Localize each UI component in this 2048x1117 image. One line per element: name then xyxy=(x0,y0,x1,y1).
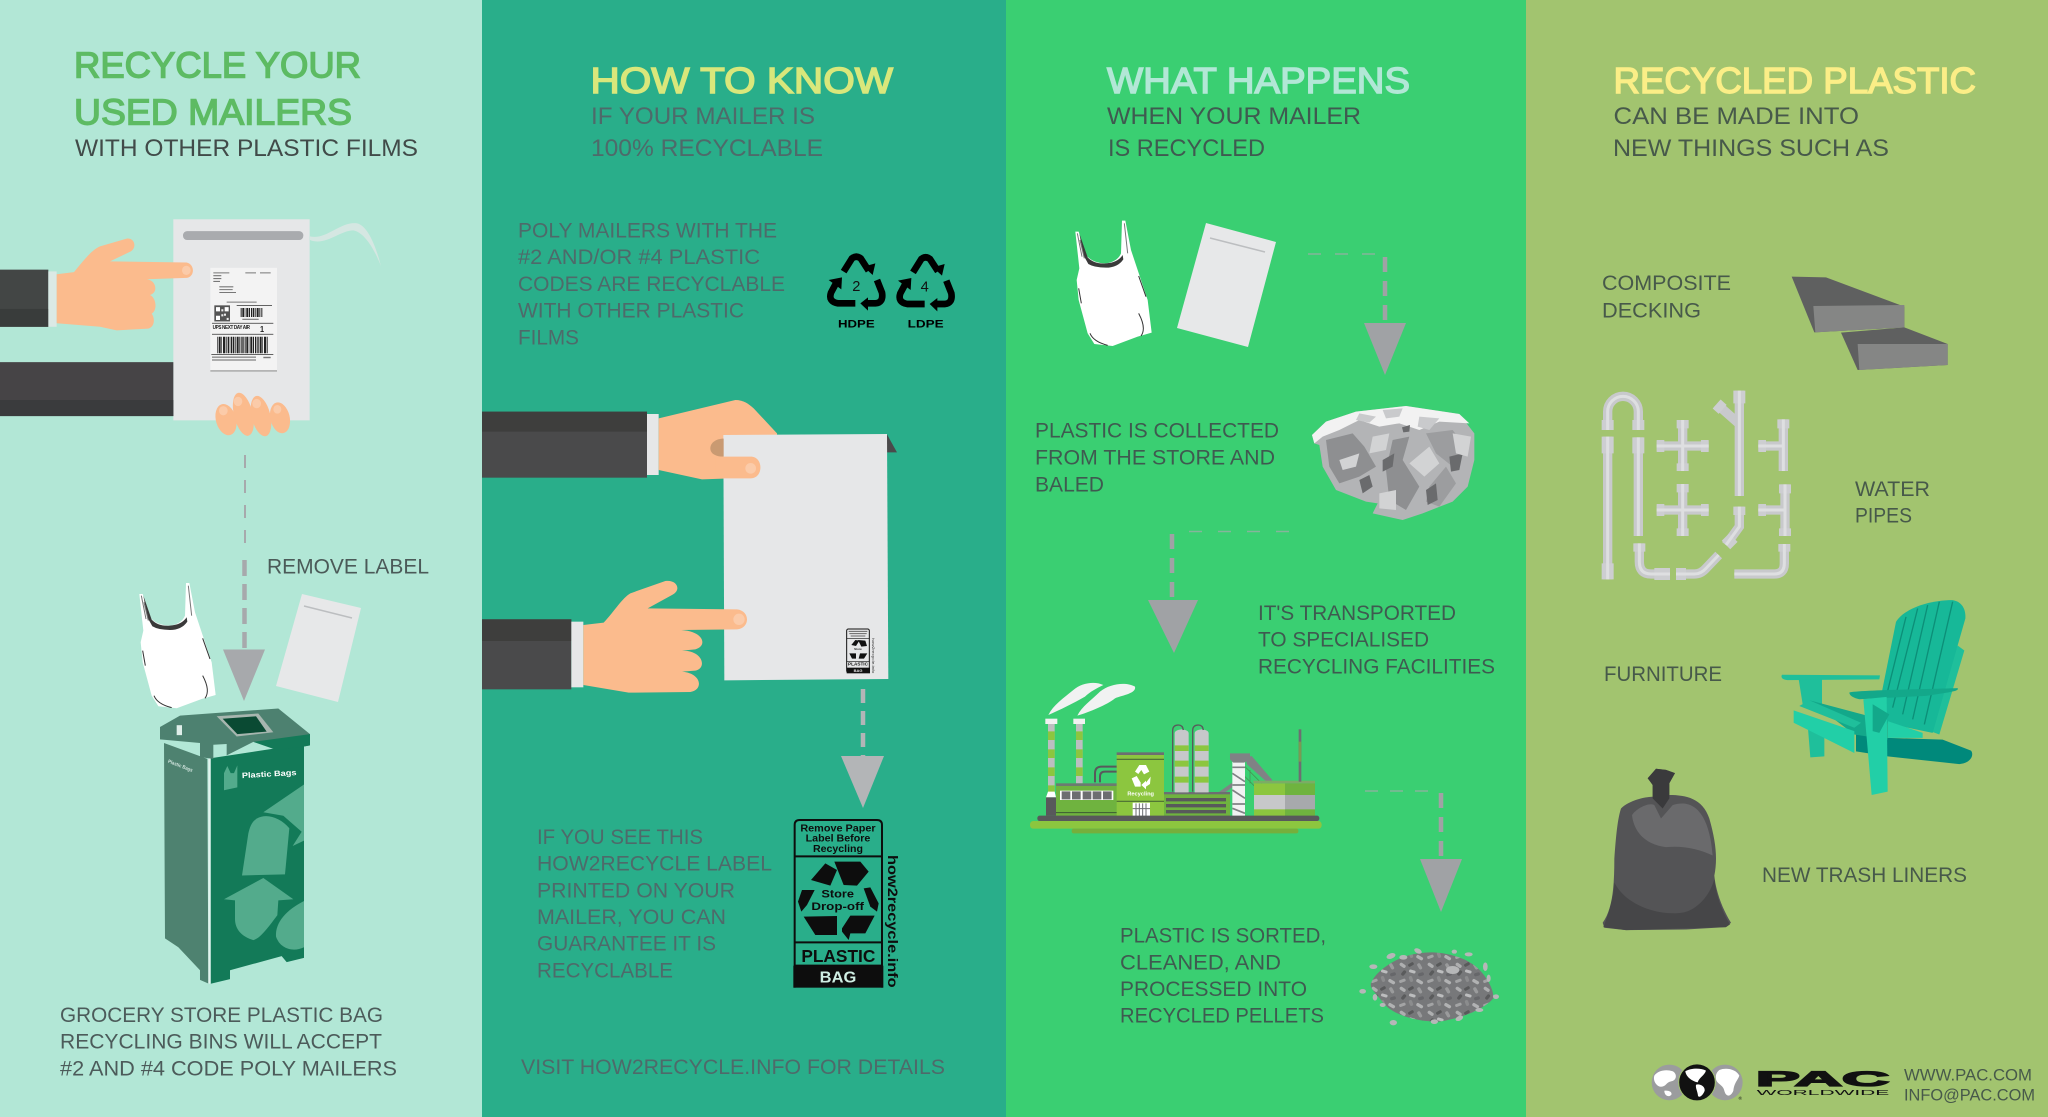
label: composite decking: COMPOSITE xyxy=(1602,271,1731,295)
heading: how to know: HOW TO KNOW xyxy=(590,60,893,101)
heading: what happens: WHEN YOUR MAILER xyxy=(1107,103,1361,130)
thumb over mailer xyxy=(710,439,760,478)
shipping label: UPS NEXT DAY AIR xyxy=(213,325,250,331)
icon: LDPE code 4: LDPE xyxy=(908,319,944,331)
upper arm and hand xyxy=(482,400,897,479)
heading: what happens: WHAT HAPPENS xyxy=(1107,60,1410,101)
panel: how to know xyxy=(482,0,1006,1117)
text: collected and baled: PLASTIC IS COLLECTED xyxy=(1035,419,1279,443)
label: water pipes xyxy=(1855,477,1930,528)
icon: plastic bale xyxy=(1312,406,1474,520)
how2recycle store drop-off label: Store xyxy=(821,889,854,901)
heading: recycled plastic: CAN BE MADE INTO xyxy=(1614,103,1859,130)
text: grocery store bins: GROCERY STORE PLASTIC BAG xyxy=(60,1003,383,1027)
text: transported: RECYCLING FACILITIES xyxy=(1258,654,1495,678)
heading: how to know: IF YOUR MAILER IS xyxy=(591,103,815,130)
lower pointing arm xyxy=(482,581,747,693)
how2recycle store drop-off label: Recycling xyxy=(813,844,863,855)
text: how2recycle label: IF YOU SEE THIS xyxy=(537,825,703,849)
icon: recycling bin: Plastic Bags xyxy=(167,759,194,774)
illustration: hands holding mailer with shipping label xyxy=(0,219,381,439)
heading: recycled plastic xyxy=(1613,60,1976,162)
text: plastic codes: #2 AND/OR #4 PLASTIC xyxy=(518,245,760,269)
how2recycle store drop-off label xyxy=(793,820,901,988)
dashed arrow: down to bin xyxy=(223,455,265,701)
how2recycle store drop-off label: Drop-off xyxy=(811,901,864,913)
text: transported xyxy=(1258,601,1495,678)
icon: HDPE code 2 xyxy=(829,257,882,330)
text: collected and baled xyxy=(1035,419,1279,496)
text: how2recycle label: PRINTED ON YOUR xyxy=(537,878,735,902)
text: sorted and pelletised xyxy=(1120,924,1326,1028)
text: collected and baled: BALED xyxy=(1035,472,1104,496)
mini how2recycle label xyxy=(847,629,875,674)
dashed arrow: down to label xyxy=(841,689,884,808)
logo globes xyxy=(1652,1064,1743,1101)
mini how2recycle label: PLASTIC xyxy=(848,662,869,667)
icon: decking boards xyxy=(1792,277,1948,370)
how2recycle store drop-off label: Remove Paper xyxy=(800,824,876,835)
how2recycle store drop-off label: Label Before xyxy=(806,834,871,845)
illustration: recycling factory: Recycling xyxy=(1127,791,1155,797)
shipping label xyxy=(210,268,277,372)
text: sorted and pelletised: CLEANED, AND xyxy=(1120,950,1281,974)
logo: PAC Worldwide: PAC xyxy=(1756,1068,1889,1091)
illustration: hands, mailer, codes xyxy=(482,257,952,693)
how2recycle store drop-off label: how2recycle.info xyxy=(885,855,901,988)
text: sorted and pelletised: PLASTIC IS SORTED, xyxy=(1120,924,1326,948)
fingers under mailer xyxy=(212,390,293,439)
icon: LDPE code 4 xyxy=(898,257,952,331)
text: sorted and pelletised: PROCESSED INTO xyxy=(1120,977,1307,1001)
text: plastic codes: WITH OTHER PLASTIC xyxy=(518,299,744,323)
logo: PAC Worldwide xyxy=(1652,1064,1890,1101)
text: sorted and pelletised: RECYCLED PELLETS xyxy=(1120,1004,1324,1028)
text: plastic codes xyxy=(518,218,785,349)
heading: recycled plastic: RECYCLED PLASTIC xyxy=(1614,60,1976,101)
heading: what happens: IS RECYCLED xyxy=(1108,135,1265,162)
panel: recycle your used mailers xyxy=(0,0,482,1117)
mini how2recycle label: BAG xyxy=(854,668,862,673)
dashed arrow: factory to pellets xyxy=(1365,791,1462,912)
icon: water pipes xyxy=(1608,391,1785,579)
mini how2recycle label: Store xyxy=(854,647,862,651)
logo: PAC Worldwide: WORLDWIDE xyxy=(1757,1090,1890,1097)
text: grocery store bins: #2 AND #4 CODE POLY MAILERS xyxy=(60,1056,397,1080)
mini how2recycle label: how2recycle.info xyxy=(871,638,875,674)
heading: recycle your used mailers: RECYCLE YOUR xyxy=(74,44,361,86)
dashed arrow: bale to factory xyxy=(1148,532,1289,653)
bin artwork: recycling arrows xyxy=(224,785,304,950)
heading: how to know: 100% RECYCLABLE xyxy=(591,135,823,162)
heading: recycle your used mailers: USED MAILERS xyxy=(74,92,352,132)
how2recycle store drop-off label: PLASTIC xyxy=(801,946,876,966)
heading: recycle your used mailers xyxy=(74,44,418,162)
text: transported: TO SPECIALISED xyxy=(1258,628,1429,652)
heading: recycled plastic: NEW THINGS SUCH AS xyxy=(1613,135,1889,162)
contact details: INFO@PAC.COM xyxy=(1904,1087,2035,1105)
icon: small mailer xyxy=(276,594,361,702)
label: composite decking: DECKING xyxy=(1602,298,1701,322)
dashed arrow: mailer to bale xyxy=(1308,254,1406,375)
label: furniture: FURNITURE xyxy=(1604,662,1722,686)
text: visit how2recycle: VISIT HOW2RECYCLE.INFO FOR DETAILS xyxy=(521,1055,945,1079)
icon: HDPE code 2: 2 xyxy=(852,279,860,295)
how2recycle store drop-off label: BAG xyxy=(820,970,856,987)
icon: plastic bag xyxy=(139,583,216,708)
text: how2recycle label xyxy=(537,825,772,983)
text: grocery store bins: RECYCLING BINS WILL ACCEPT xyxy=(60,1030,382,1054)
icon: LDPE code 4: 4 xyxy=(921,280,929,296)
icon: recycling bin: Plastic Bags xyxy=(242,768,297,780)
pointing hand xyxy=(57,238,193,330)
heading: how to know xyxy=(590,60,893,162)
text: plastic codes: CODES ARE RECYCLABLE xyxy=(518,272,785,296)
text: plastic codes: FILMS xyxy=(518,325,579,349)
label: remove label: REMOVE LABEL xyxy=(267,554,429,578)
heading: what happens xyxy=(1107,60,1410,162)
icon: recycling bin xyxy=(160,708,310,984)
mailer xyxy=(723,434,888,680)
text: how2recycle label: RECYCLABLE xyxy=(537,959,673,983)
label: water pipes: WATER xyxy=(1855,477,1930,501)
factory recycle symbol xyxy=(1132,765,1151,789)
illustration: recycling factory xyxy=(1030,683,1322,833)
icon: plastic bag xyxy=(1075,221,1152,346)
panel: recycled plastic xyxy=(1526,0,2048,1117)
label: composite decking xyxy=(1602,271,1731,322)
heading: recycle your used mailers: WITH OTHER PLASTIC FILMS xyxy=(75,135,418,162)
icon: HDPE code 2: HDPE xyxy=(838,318,875,330)
logo globes: ® xyxy=(1739,1095,1743,1101)
icon: mailer xyxy=(1177,223,1276,347)
text: plastic codes: POLY MAILERS WITH THE xyxy=(518,218,777,242)
icon: trash bag xyxy=(1603,769,1731,930)
text: transported: IT'S TRANSPORTED xyxy=(1258,601,1456,625)
text: how2recycle label: MAILER, YOU CAN xyxy=(537,905,726,929)
shipping label: 1 xyxy=(260,325,264,334)
text: collected and baled: FROM THE STORE AND xyxy=(1035,445,1275,469)
icon: adirondack chair xyxy=(1781,600,1972,795)
label: water pipes: PIPES xyxy=(1855,504,1912,528)
label: new trash liners: NEW TRASH LINERS xyxy=(1762,863,1967,887)
contact details xyxy=(1904,1067,2035,1105)
panel: what happens xyxy=(1006,0,1526,1117)
text: grocery store bins xyxy=(60,1003,397,1080)
icon: recycled pellets xyxy=(1359,947,1499,1025)
text: how2recycle label: GUARANTEE IT IS xyxy=(537,932,716,956)
contact details: WWW.PAC.COM xyxy=(1904,1067,2032,1085)
text: how2recycle label: HOW2RECYCLE LABEL xyxy=(537,852,772,876)
